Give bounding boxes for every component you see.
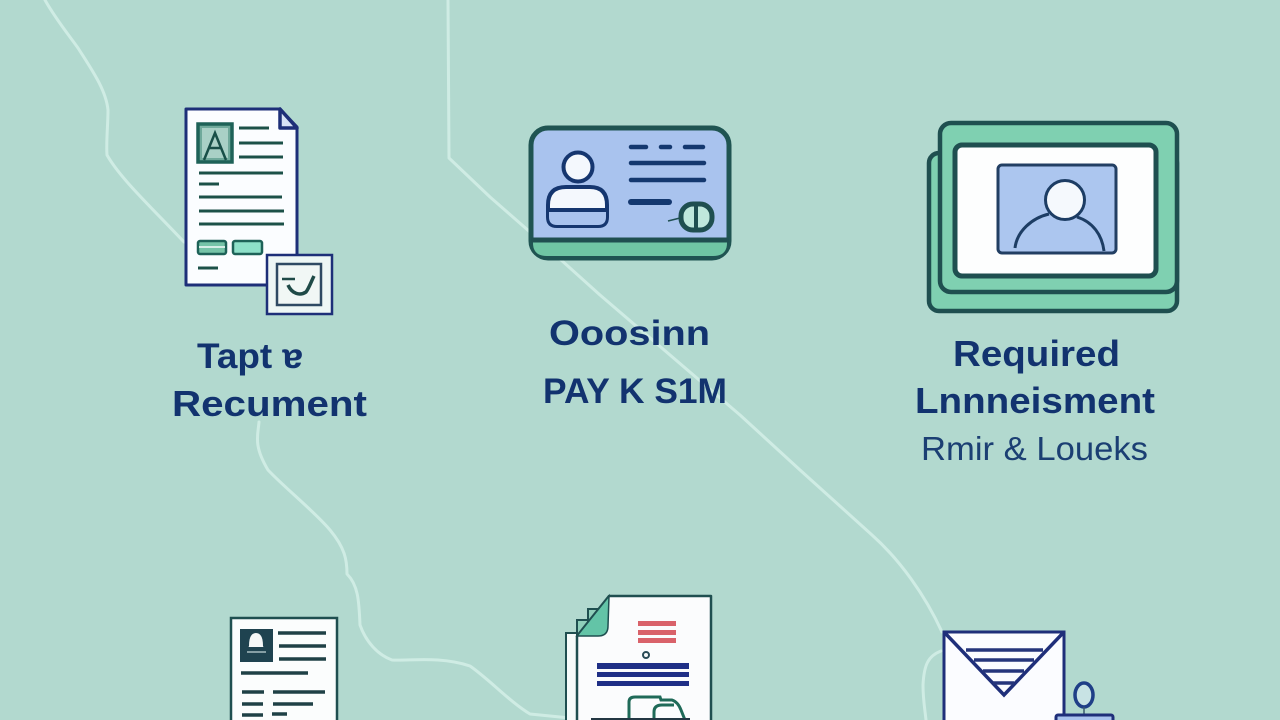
label: column 1 heading: Tapt ɐ xyxy=(197,337,303,376)
label: column 2 heading: PAY K S1M xyxy=(543,372,727,411)
label: column 3 heading: Rmir & Loueks xyxy=(921,430,1148,467)
icon: ID card xyxy=(531,128,729,258)
label: column 1 heading: Recument xyxy=(172,383,367,424)
icon: resume document xyxy=(186,109,297,285)
icon: bottom centre document with truck xyxy=(566,596,711,720)
label: column 3 heading: Required xyxy=(953,333,1120,374)
icon: bottom left document xyxy=(231,618,337,720)
label: column 2 heading xyxy=(543,314,727,411)
icon: stacked photo frame xyxy=(929,123,1177,311)
label: column 1 heading xyxy=(172,337,367,424)
label: column 3 heading xyxy=(915,333,1155,467)
icon: envelope with mailbox xyxy=(944,632,1113,720)
label: column 2 heading: Ooosinn xyxy=(549,314,710,353)
label: column 3 heading: Lnnneisment xyxy=(915,380,1155,421)
icon: signature stamp box xyxy=(267,255,332,314)
